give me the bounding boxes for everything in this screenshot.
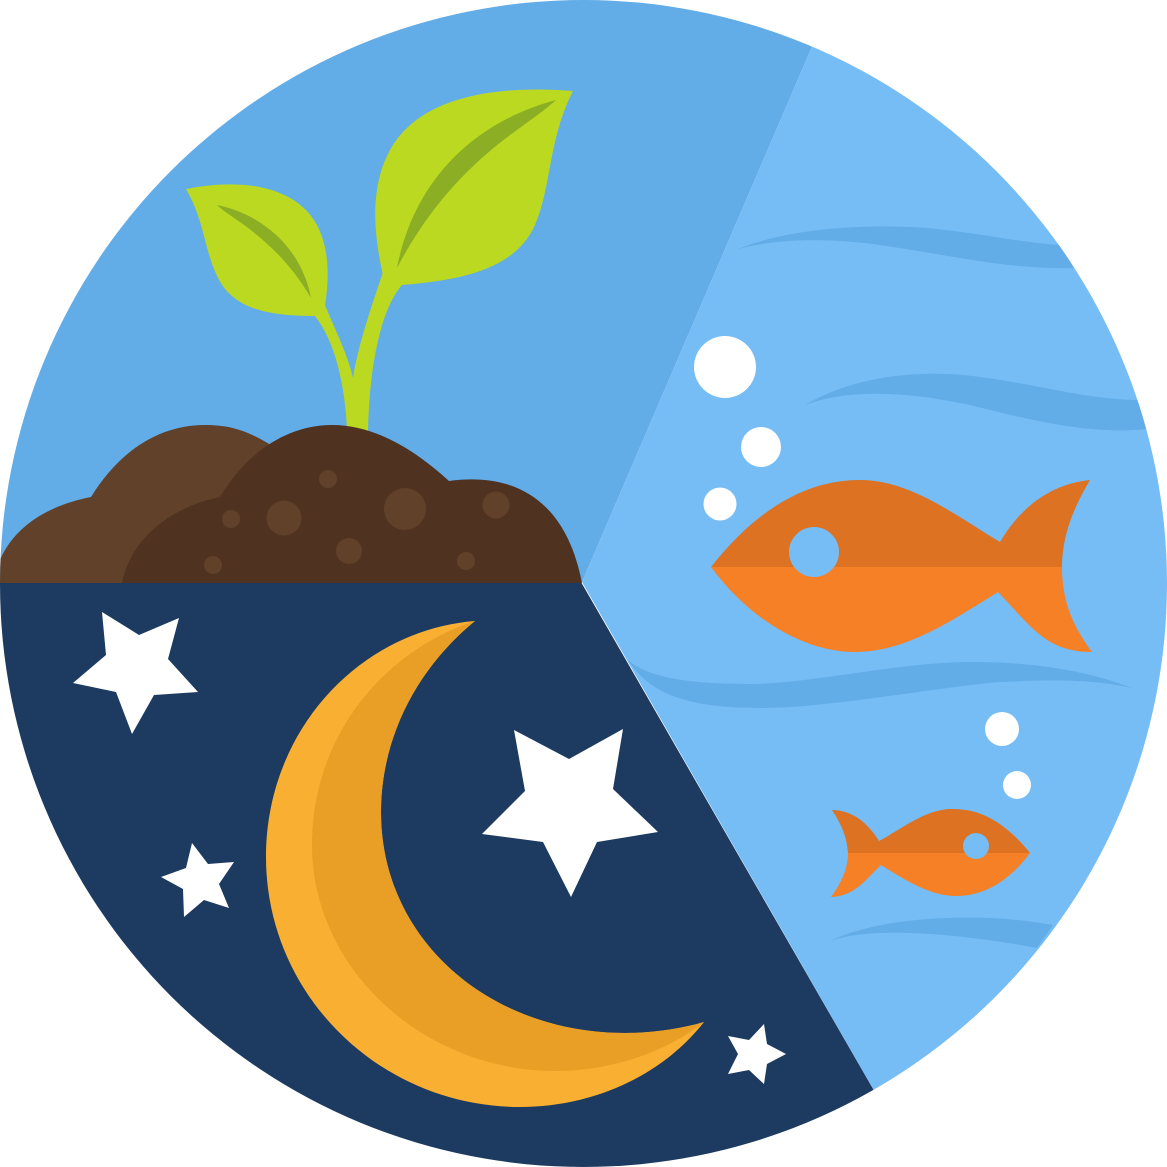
- icon: water waves: [628, 226, 1147, 948]
- icon: left leaf: [186, 184, 328, 316]
- icon: small fish: [831, 809, 1030, 897]
- icon: bubbles: [694, 336, 1031, 799]
- icon: large fish: [711, 480, 1092, 652]
- icon: crescent moon: [266, 621, 704, 1107]
- panel: sky segment: [0, 0, 832, 583]
- icon: plant stem: [314, 272, 402, 432]
- panel: night segment: [0, 582, 918, 1167]
- panel: water segment: [582, 46, 1167, 1090]
- icon: stars: [73, 612, 786, 1084]
- icon: back soil mound: [0, 425, 270, 583]
- icon: front soil mound: [122, 425, 582, 583]
- icon: right leaf: [375, 89, 573, 285]
